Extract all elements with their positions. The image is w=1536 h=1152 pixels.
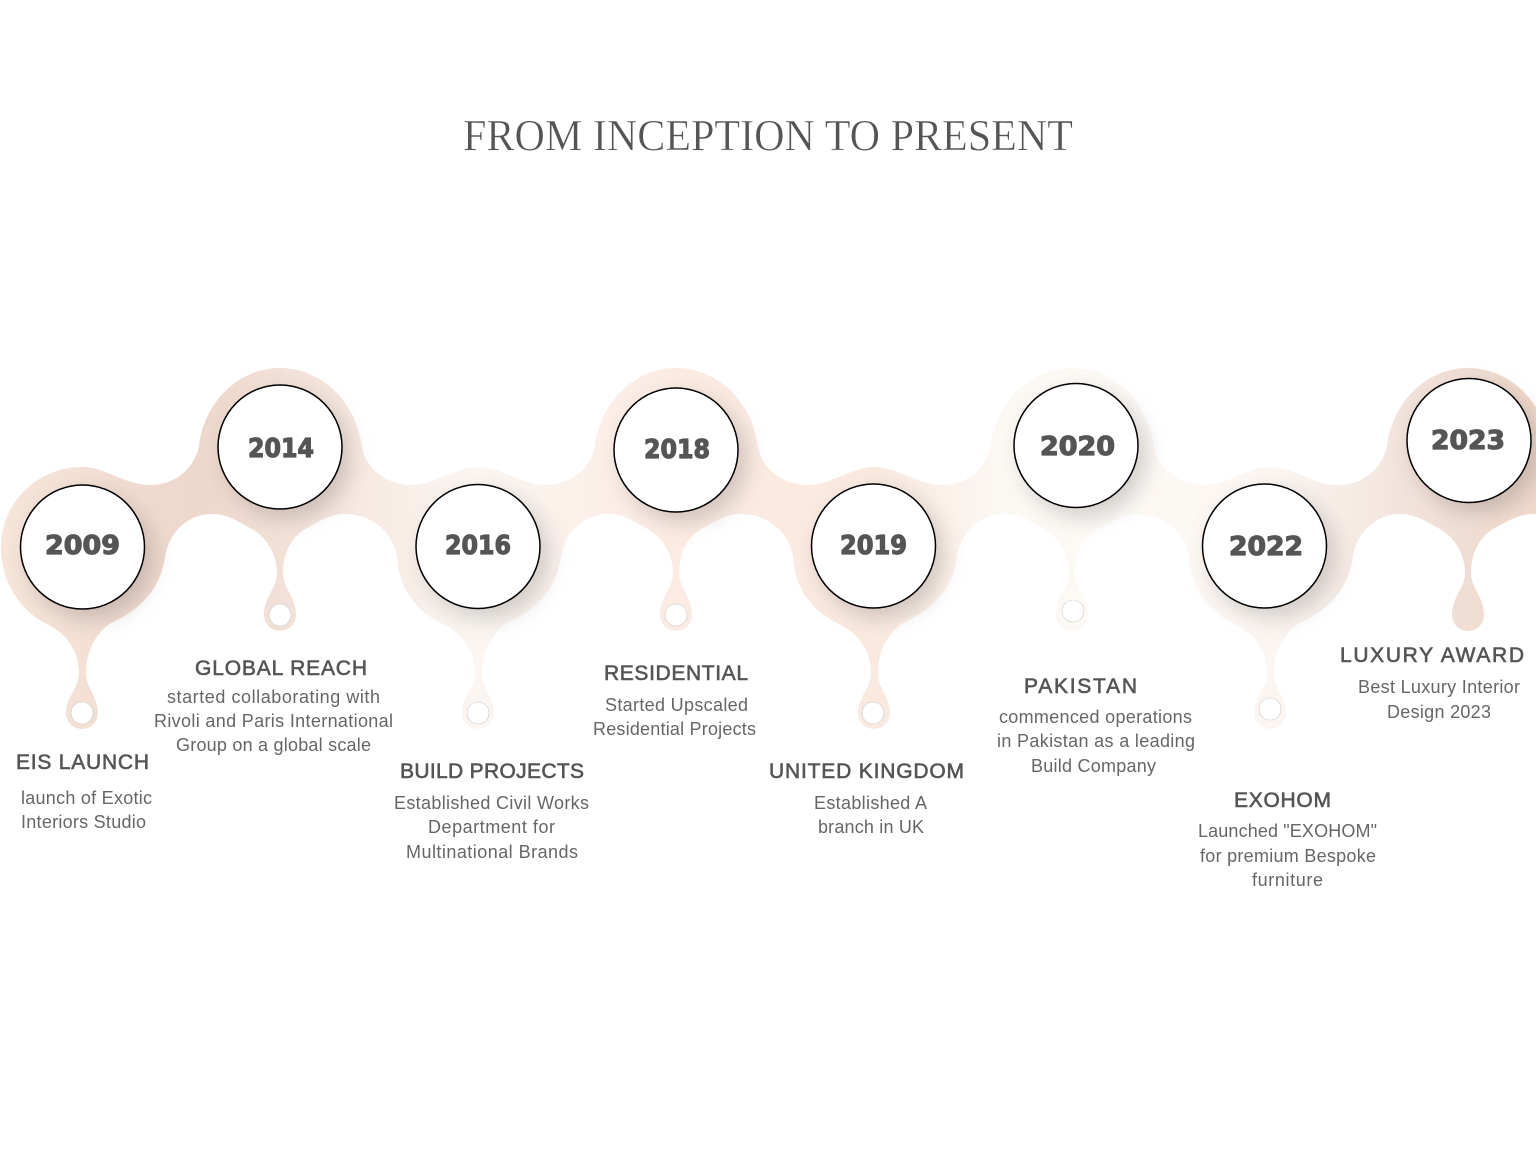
year badge 2009: 2009 [45,531,120,561]
year badge 2018 [614,388,738,512]
milestone text: GLOBAL REACH: started collaborating with [167,687,380,707]
year badge 2019: 2019 [840,531,907,561]
year badge 2023 [1407,378,1531,502]
milestone text: GLOBAL REACH: GLOBAL REACH [195,657,367,680]
year badge 2016: 2016 [445,531,511,561]
milestone text: GLOBAL REACH: Rivoli and Paris International [154,711,393,731]
milestone text: EIS LAUNCH: launch of Exotic [21,788,152,808]
milestone text: LUXURY AWARD: Best Luxury Interior [1358,677,1520,697]
milestone text: EXOHOM: EXOHOM [1234,789,1331,812]
milestone text: RESIDENTIAL: Residential Projects [593,719,756,739]
milestone text: PAKISTAN [997,675,1195,776]
milestone text: PAKISTAN: Build Company [1031,756,1156,776]
milestone text: GLOBAL REACH [154,657,393,755]
year badge 2020 [1014,384,1138,508]
timeline ribbon [1,368,1536,729]
milestone text: PAKISTAN: PAKISTAN [1024,675,1137,698]
year badge 2022: 2022 [1229,532,1303,562]
milestone text: UNITED KINGDOM [769,760,964,837]
milestone text: BUILD PROJECTS: Established Civil Works [394,793,589,813]
marker dot 2022 [1259,698,1281,720]
milestone text: LUXURY AWARD [1340,644,1524,722]
milestone text: RESIDENTIAL [593,662,756,739]
milestone text: UNITED KINGDOM: Established A [814,793,927,813]
milestone text: EXOHOM: furniture [1252,870,1323,890]
milestone text: GLOBAL REACH: Group on a global scale [176,735,371,755]
milestone text: BUILD PROJECTS: Department for [428,817,555,837]
title: FROM INCEPTION TO PRESENT [463,111,1073,160]
milestone text: UNITED KINGDOM: branch in UK [818,817,924,837]
marker dot 2014 [269,604,291,626]
milestone text: RESIDENTIAL: RESIDENTIAL [604,662,748,685]
milestone text: LUXURY AWARD: LUXURY AWARD [1340,644,1524,667]
milestone text: BUILD PROJECTS: BUILD PROJECTS [400,760,584,783]
milestone text: RESIDENTIAL: Started Upscaled [605,695,748,715]
year badge 2016 [416,484,540,608]
year badge 2022 [1202,484,1326,608]
milestone text: PAKISTAN: commenced operations [999,707,1192,727]
milestone text: PAKISTAN: in Pakistan as a leading [997,731,1195,751]
milestone text: EXOHOM [1198,789,1377,890]
milestone text: EIS LAUNCH [16,751,152,832]
marker dot 2016 [467,702,489,724]
marker dot 2018 [665,604,687,626]
year badge 2019 [812,484,936,608]
milestone text: LUXURY AWARD: Design 2023 [1387,702,1491,722]
milestone text: EXOHOM: Launched "EXOHOM" [1198,821,1377,841]
year badge 2009 [20,485,144,609]
marker dot 2019 [862,702,884,724]
marker dot 2020 [1062,600,1084,622]
milestone text: BUILD PROJECTS [394,760,589,862]
year badge 2020: 2020 [1040,432,1115,462]
marker dot 2009 [71,702,93,724]
year badge 2018: 2018 [644,435,710,465]
year badge 2014: 2014 [248,434,314,464]
year badge 2023: 2023 [1431,426,1505,456]
milestone text: EIS LAUNCH: EIS LAUNCH [16,751,149,774]
milestone text: EIS LAUNCH: Interiors Studio [21,812,146,832]
milestone text: UNITED KINGDOM: UNITED KINGDOM [769,760,964,783]
milestone text: EXOHOM: for premium Bespoke [1200,846,1376,866]
milestone text: BUILD PROJECTS: Multinational Brands [406,842,578,862]
year badge 2014 [218,385,342,509]
